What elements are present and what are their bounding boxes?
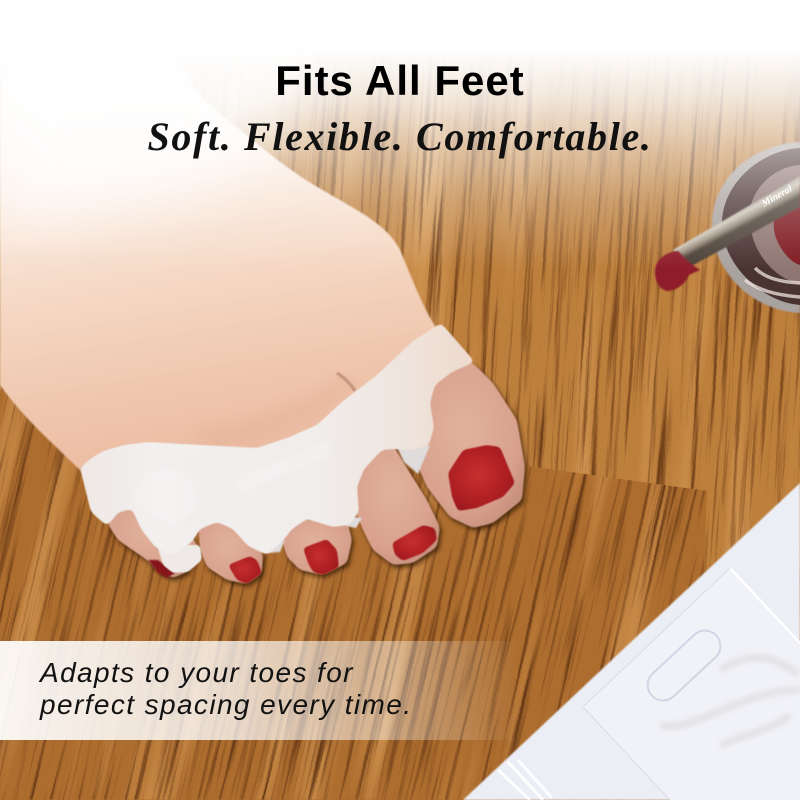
hidden gel pieces	[266, 445, 430, 553]
caption text	[38, 657, 412, 720]
marble veins	[660, 658, 800, 745]
caption text: Adapts to your toes for	[40, 657, 354, 688]
top white fade	[0, 0, 800, 270]
foot crease	[337, 373, 355, 391]
caption text: perfect spacing every time.	[40, 689, 412, 720]
lipstick jar	[712, 142, 800, 313]
title: Fits All Feet	[275, 57, 525, 104]
nails	[148, 445, 515, 584]
caption band	[0, 641, 520, 740]
little toe	[107, 500, 200, 578]
brand text on handle: Mineral	[759, 183, 795, 210]
subtitle: Soft. Flexible. Comfortable.	[147, 114, 653, 159]
separator tab	[157, 545, 202, 573]
gloss stripes	[498, 760, 552, 800]
separator body	[80, 323, 475, 555]
toe separator	[80, 323, 475, 573]
foot	[0, 0, 527, 587]
third toe	[282, 520, 352, 575]
phone button	[641, 624, 727, 707]
second toe	[355, 440, 440, 565]
left white fade	[0, 0, 330, 230]
lower plank	[0, 390, 707, 800]
big toe	[415, 362, 525, 528]
brush tip	[655, 251, 700, 291]
separator highlights	[134, 470, 196, 523]
phone case	[463, 483, 800, 800]
toe contact shadows	[109, 365, 527, 587]
fourth toe	[198, 518, 263, 584]
foot body	[0, 0, 445, 480]
lip brush	[655, 176, 800, 291]
